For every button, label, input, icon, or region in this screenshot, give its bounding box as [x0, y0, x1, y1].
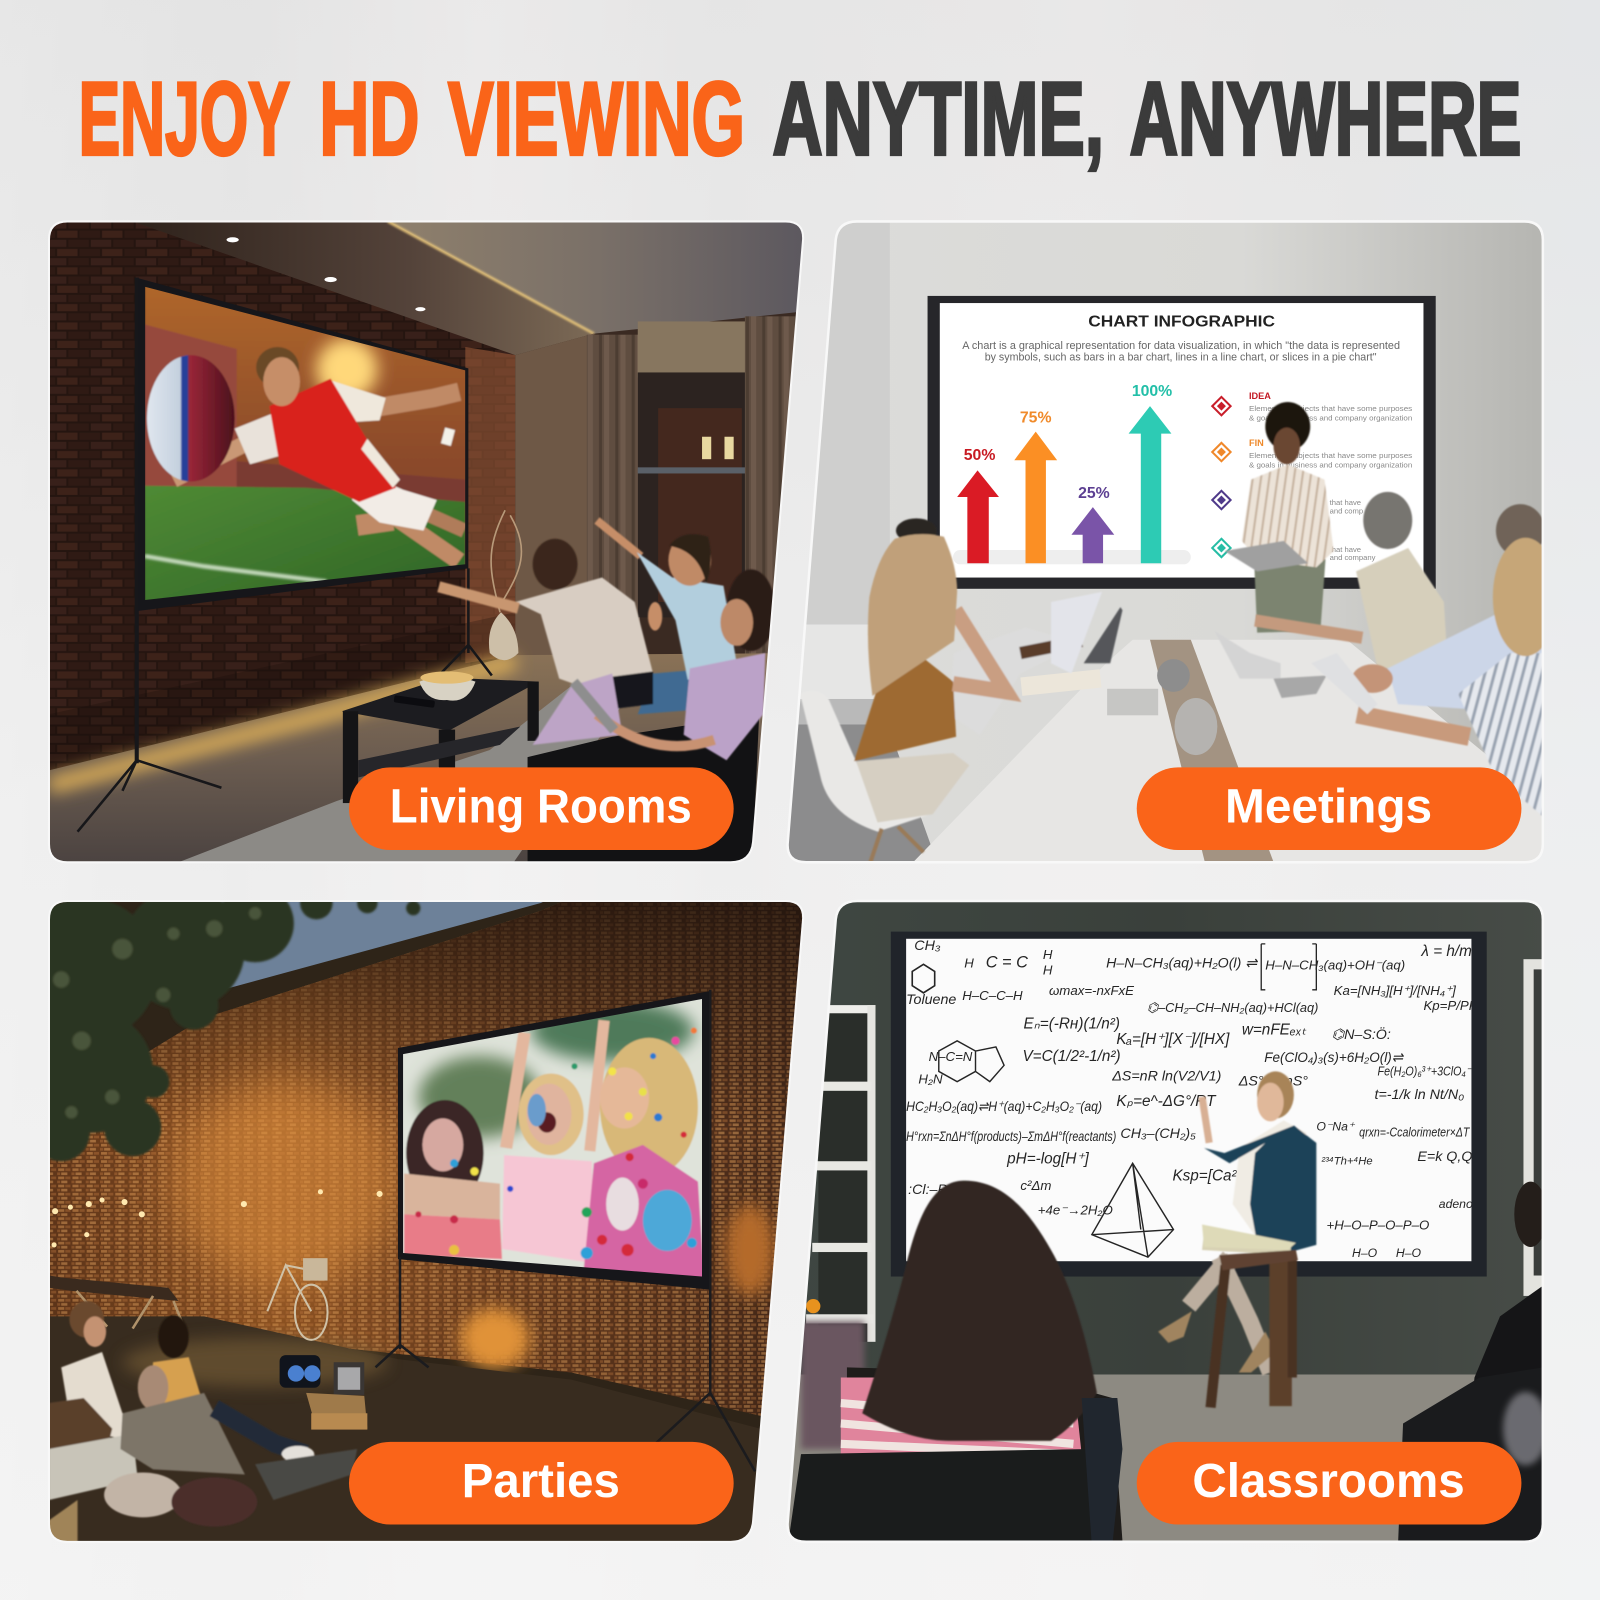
audience: girl in foreground — [788, 1181, 1122, 1546]
chemistry formulas: t=-1/k ln Nt/N₀ — [1374, 1087, 1464, 1103]
legend diamonds — [1212, 397, 1231, 557]
chemistry formulas: ²³⁴Th+⁴He — [1321, 1155, 1373, 1167]
legend text: & goals in business and company organization — [1249, 460, 1412, 469]
legend text: IDEA — [1249, 391, 1271, 401]
chemistry formulas: λ = h/mv — [1420, 943, 1481, 960]
chemistry formulas: +H–O–P–O–P–O — [1327, 1218, 1429, 1233]
legend text: FIN — [1249, 438, 1264, 448]
chemistry formulas: E=k Q,Q/d — [1417, 1149, 1485, 1165]
legend text: that have — [1330, 498, 1361, 507]
chemistry formulas: Toluene — [906, 992, 956, 1008]
chemistry formulas: C = C — [986, 953, 1028, 971]
arrow 75%: 75% — [1020, 409, 1052, 426]
bar chart arrows — [957, 383, 1172, 563]
chemistry formulas — [906, 938, 1485, 1260]
viewer: man with raised arm — [597, 520, 739, 714]
chemistry formulas: qrxn=-Ccalorimeter×ΔT — [1359, 1125, 1470, 1140]
chemistry formulas: Fe(H₂O)₆³⁺+3ClO₄⁻ — [1378, 1064, 1472, 1079]
viewer: boy — [439, 539, 653, 709]
projector screen — [891, 932, 1487, 1277]
string lights — [52, 1189, 383, 1247]
chemistry formulas: H — [1043, 962, 1053, 977]
chemistry formulas: H–O — [1396, 1246, 1422, 1260]
arrow 100%: 100% — [1132, 383, 1172, 400]
lower wall and floor — [786, 624, 939, 867]
brick wall — [49, 898, 816, 1429]
chemistry formulas: H–N–CH₃ — [1265, 957, 1324, 972]
chemistry formulas: adenos — [1439, 1197, 1479, 1211]
right shelves — [1523, 959, 1543, 1296]
evening sky — [204, 898, 551, 995]
arrow 75% — [1014, 409, 1057, 563]
chemistry formulas: H — [964, 955, 974, 970]
title: dark part: ANYTIME, — [772, 62, 1104, 178]
tree foliage — [15, 885, 420, 1161]
ground — [41, 1316, 760, 1551]
label pill: meetings: Meetings — [1225, 780, 1432, 833]
label pill: parties: Parties — [462, 1455, 620, 1508]
chemistry formulas: H–C–C–H — [962, 988, 1023, 1003]
title: orange part: HD — [319, 62, 419, 178]
legend text: that have — [1330, 545, 1361, 554]
viewer: woman — [533, 569, 776, 760]
label pill: living rooms — [349, 767, 734, 850]
projector screen with stand — [78, 278, 492, 832]
chemistry formulas: Ka=[NH₃][H⁺]/[NH₄⁺] — [1334, 983, 1456, 998]
label pill: parties — [349, 1442, 734, 1524]
chemistry formulas: H°rxn=ΣnΔH°f(products)–ΣmΔH°f(reactants) — [906, 1129, 1116, 1145]
chemistry formulas: H₂N — [918, 1072, 943, 1087]
sofa — [528, 714, 759, 867]
legend text — [1249, 391, 1412, 562]
chemistry formulas: Kₚ=e^-ΔG°/RT — [1116, 1093, 1217, 1110]
label pill: living rooms: Living Rooms — [390, 780, 692, 833]
projector screen with stand — [376, 990, 755, 1471]
title: orange part: VIEWING — [448, 62, 745, 178]
chemistry formulas: ⌬–CH₂–CH–NH₂(aq)+HCl(aq) — [1147, 1000, 1318, 1015]
side wall, curtains and window — [515, 316, 798, 663]
wall column — [806, 223, 890, 624]
audience: right side — [1398, 1182, 1548, 1546]
legend text: Element of subjects that have some purposes — [1249, 404, 1412, 413]
seated man — [1214, 492, 1448, 698]
chemistry formulas: Kₐ=[H⁺][X⁻]/[HX] — [1116, 1031, 1230, 1048]
chemistry formulas: pH=-log[H⁺] — [1006, 1150, 1090, 1167]
chemistry formulas: Kp=P/PP — [1423, 998, 1478, 1013]
label pill: classrooms — [1137, 1442, 1521, 1524]
label pill: classrooms: Classrooms — [1192, 1455, 1465, 1508]
chemistry formulas: (aq)+OH⁻(aq) — [1323, 957, 1405, 972]
legend text: & goals in business and company organization — [1249, 413, 1412, 422]
chemistry formulas: H–N–CH₃(aq)+H₂O(l) ⇌ — [1106, 955, 1258, 971]
presenter — [1224, 402, 1334, 633]
vase — [489, 510, 521, 660]
chemistry formulas: Eₙ=(-Rʜ)(1/n²) — [1023, 1016, 1120, 1033]
chemistry formulas: ωmax=-nxFxE — [1049, 983, 1134, 998]
chemistry formulas: :Cl:–P — [908, 1182, 947, 1198]
picnic table — [49, 1276, 184, 1329]
chart slide description: A chart is a graphical representation for data visualization, in which "the data is represented — [962, 340, 1400, 352]
label pill: meetings — [1137, 767, 1521, 850]
viewers — [439, 520, 776, 760]
panel: meetings — [786, 221, 1561, 867]
screen image: laughing friends with confetti — [398, 995, 704, 1281]
coffee table with popcorn — [342, 671, 539, 803]
arrow 50% — [957, 447, 999, 563]
speaker and projector — [280, 1355, 367, 1430]
chemistry formulas: c²Δm — [1020, 1178, 1051, 1193]
title — [79, 62, 1521, 178]
chemistry formulas: +4e⁻→2H₂O — [1038, 1202, 1113, 1217]
table — [908, 640, 1561, 867]
chemistry formulas: H — [1043, 947, 1053, 962]
panel: parties — [15, 885, 816, 1551]
screen image: rugby player — [145, 281, 467, 607]
chemistry formulas: HC₂H₃O₂(aq)⇌H⁺(aq)+C₂H₃O₂⁻(aq) — [906, 1099, 1102, 1115]
chemistry formulas: w=nFEₑₓₜ — [1242, 1022, 1307, 1039]
bicycle — [267, 1265, 328, 1340]
projector screen — [928, 296, 1436, 589]
chart slide title: CHART INFOGRAPHIC — [1088, 314, 1275, 331]
right-side attendees — [1311, 504, 1558, 816]
panel: classrooms — [786, 898, 1548, 1551]
teacher — [1158, 1071, 1316, 1408]
title: orange part — [79, 62, 745, 178]
arrow 100% — [1129, 383, 1172, 563]
floor and rug — [49, 653, 806, 867]
legend text: and company — [1330, 553, 1376, 562]
left shelves — [806, 1005, 876, 1342]
chart slide description — [962, 340, 1400, 364]
brick wall — [49, 221, 515, 770]
arrow 25% — [1071, 485, 1114, 563]
chemistry formulas: CH₃ — [914, 938, 941, 954]
chemistry formulas: ΔS=nR ln(V2/V1) — [1111, 1069, 1221, 1085]
chemistry formulas: N–C=N — [929, 1049, 973, 1064]
chemistry formulas: Ksp=[Ca²⁺ — [1172, 1168, 1247, 1185]
chart slide description: by symbols, such as bars in a bar chart, lines in a line chart, or slices in a pie chart" — [985, 352, 1377, 364]
ceiling — [133, 221, 806, 355]
chemistry formulas: O⁻Na⁺ — [1316, 1120, 1356, 1134]
title: orange part: ENJOY — [79, 62, 290, 178]
picnic guests — [49, 1301, 357, 1543]
arrow 50%: 50% — [964, 447, 995, 464]
panel: living rooms — [41, 214, 816, 867]
floor — [786, 1374, 1546, 1548]
seated woman with chair — [800, 518, 1122, 862]
legend text: Element of subjects that have some purposes — [1249, 451, 1412, 460]
chemistry formulas: Fe(ClO₄)₃(s)+6H₂O(l)⇌ — [1264, 1050, 1404, 1066]
chemistry formulas: V=C(1/2²-1/n²) — [1022, 1048, 1121, 1065]
chemistry formulas: H–O — [1352, 1246, 1378, 1260]
chemistry formulas: CH₃–(CH₂)₅ — [1120, 1126, 1196, 1142]
chemistry formulas: ⌬N–S:Ö: — [1332, 1025, 1391, 1043]
chemistry formulas: ΔS°- ΣmS° — [1238, 1074, 1308, 1090]
legend text: and comp — [1330, 506, 1363, 515]
arrow 25%: 25% — [1078, 485, 1110, 502]
title: dark part — [772, 62, 1521, 178]
